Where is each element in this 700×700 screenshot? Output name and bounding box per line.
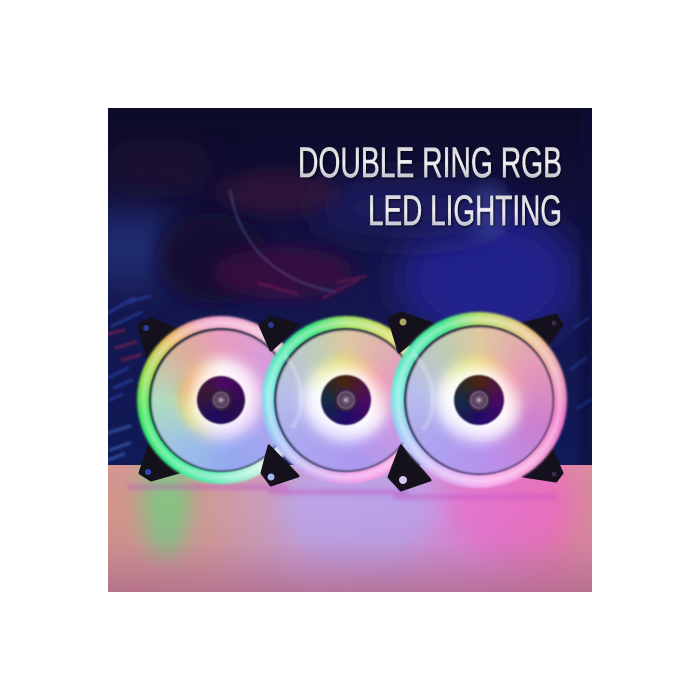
middle fan hub glow: [303, 357, 389, 443]
middle fan hub cap: [334, 388, 358, 412]
left fan ring highlight: [137, 316, 305, 484]
left fan hub: [197, 376, 245, 424]
fan: middle: [258, 314, 411, 486]
middle fan blade arc: [282, 354, 304, 430]
green reflection: [142, 438, 190, 562]
middle fan blade disc: [276, 330, 416, 470]
middle fan hub halo: [303, 357, 389, 443]
right fan ring highlight: [391, 312, 567, 488]
right fan blade arc: [412, 352, 435, 432]
magenta reflection: [448, 440, 568, 560]
right fan dark gap: [404, 325, 554, 475]
middle fan frame: [258, 316, 300, 486]
middle fan hub: [321, 375, 371, 425]
left fan outer LED ring: [137, 316, 305, 484]
fan: left: [135, 314, 285, 486]
right fan hub cap: [467, 388, 491, 412]
right fan outer LED ring: [391, 312, 567, 488]
fan: right: [388, 310, 569, 492]
heading: [298, 139, 562, 235]
middle fan ring highlight: [262, 316, 430, 484]
shadow under fans: [128, 487, 558, 497]
right fan frame: [388, 312, 564, 492]
panel: product photo: [108, 108, 592, 592]
table surface with coloured reflections: [108, 465, 592, 592]
left fan blade disc: [150, 330, 292, 470]
middle fan dark gap: [274, 328, 418, 472]
left fan hub cap: [210, 389, 232, 411]
right fan hub halo: [436, 357, 522, 443]
right fan hub glow: [435, 356, 523, 444]
lilac reflection: [283, 455, 433, 565]
left fan frame: [138, 318, 180, 482]
background: dark blue wall with paint splashes: [108, 108, 592, 465]
right fan hub: [454, 375, 504, 425]
right fan blade disc: [406, 326, 552, 474]
middle fan outer LED ring: [262, 316, 430, 484]
left fan dark gap: [149, 328, 293, 472]
left fan hub halo: [179, 358, 263, 442]
left fan hub glow: [179, 358, 263, 442]
